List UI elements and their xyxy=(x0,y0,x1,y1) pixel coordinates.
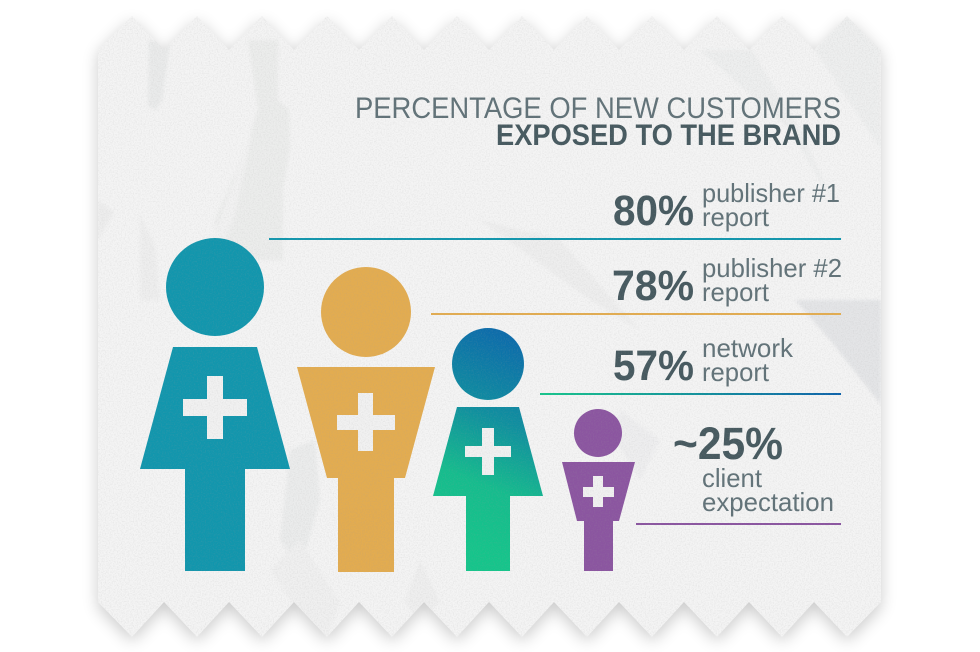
title: EXPOSED TO THE BRAND xyxy=(496,119,841,152)
stat: 80% publisher #1 report: publisher #1 xyxy=(702,178,840,208)
stat: 57% network report: network xyxy=(702,333,794,363)
stat: ~25% client expectation: client xyxy=(702,463,763,493)
stat: 80% publisher #1 report: 80% xyxy=(613,187,694,235)
person figure: teal, publisher #1 xyxy=(140,238,290,571)
stat: 78% publisher #2 report: publisher #2 xyxy=(702,253,842,283)
person figure: purple, client expectation xyxy=(562,409,635,571)
person figure: orange, publisher #2 xyxy=(297,267,435,572)
title xyxy=(355,92,841,152)
stat: ~25% client expectation xyxy=(636,418,841,525)
stat: 80% publisher #1 report: report xyxy=(702,202,770,232)
stat: ~25% client expectation: ~25% xyxy=(673,418,783,469)
person figure: green-blue gradient, network xyxy=(433,328,543,571)
stat: ~25% client expectation: expectation xyxy=(702,487,834,517)
stat: 78% publisher #2 report: 78% xyxy=(612,262,694,310)
stat: 80% publisher #1 report xyxy=(269,178,841,240)
stat: 57% network report xyxy=(540,333,841,395)
stat: 78% publisher #2 report: report xyxy=(702,277,770,307)
stat: 78% publisher #2 report xyxy=(431,253,842,315)
paper background xyxy=(90,10,890,645)
stat: 57% network report: 57% xyxy=(613,342,694,390)
stat: 57% network report: report xyxy=(702,357,770,387)
title: PERCENTAGE OF NEW CUSTOMERS xyxy=(355,92,841,125)
